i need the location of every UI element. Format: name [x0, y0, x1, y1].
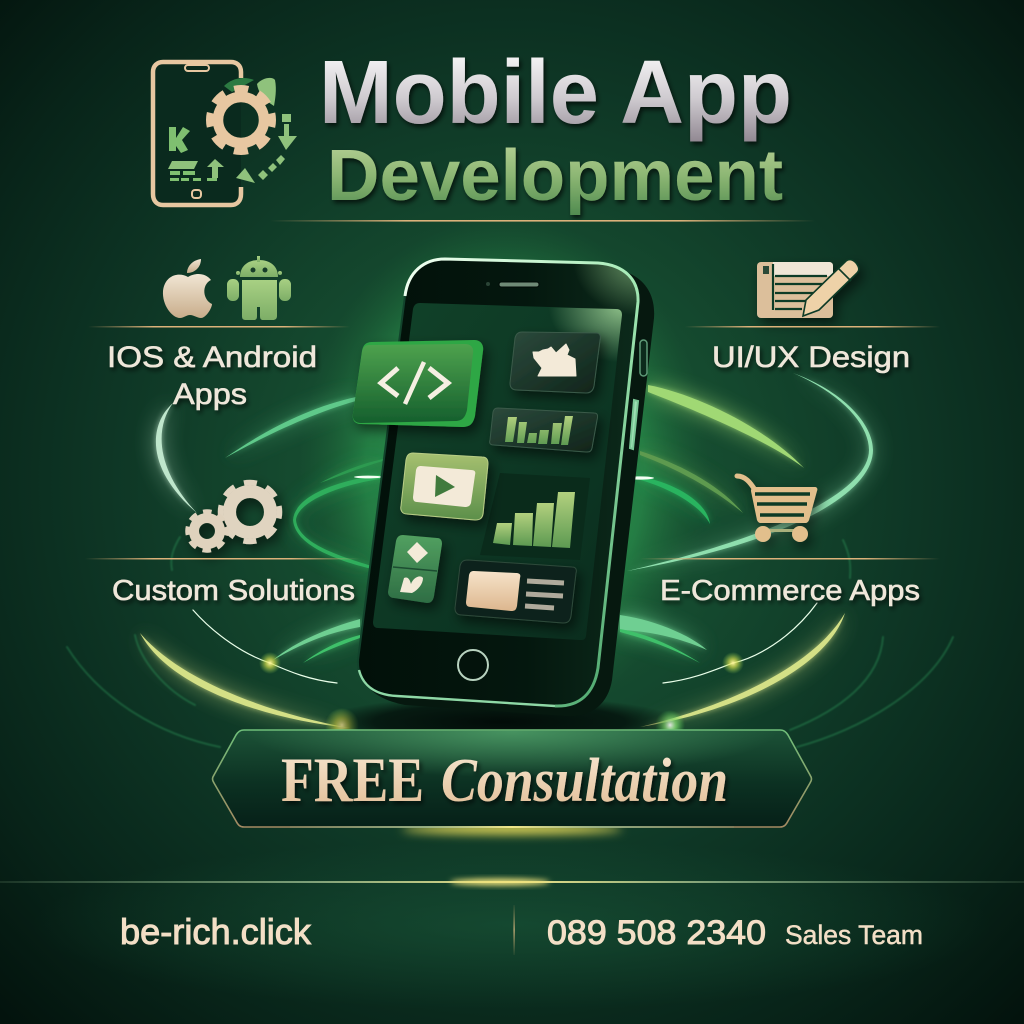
orbit light rings	[67, 373, 953, 747]
banner: free consultation	[212, 730, 812, 827]
phone face sheen	[520, 261, 638, 360]
banner bottom glow	[402, 824, 622, 834]
label: IOS & Android	[107, 341, 317, 374]
social card	[510, 332, 600, 393]
screen panel	[373, 303, 622, 640]
bright phone edge: top and right	[405, 259, 638, 706]
title	[319, 43, 792, 216]
side buttons	[630, 340, 647, 449]
feature: custom solutions	[85, 482, 360, 607]
footer: website: be-rich.click	[120, 911, 312, 952]
footer: sales team: Sales Team	[785, 920, 923, 950]
footer divider	[0, 878, 1024, 886]
shadow beneath phone	[320, 696, 680, 748]
screen shine	[500, 306, 622, 400]
tile with two icons	[388, 535, 442, 603]
video card	[401, 453, 488, 520]
banner text	[281, 744, 728, 815]
smartphone	[353, 259, 654, 716]
header logo icon: phone with gear	[153, 62, 297, 205]
footer vertical divider	[514, 905, 515, 955]
small bar chart card	[490, 408, 598, 452]
icon: document and pencil	[757, 260, 859, 318]
home button	[458, 650, 488, 680]
label: Apps	[173, 378, 247, 411]
title line 1: Mobile App	[319, 43, 792, 143]
banner text: Consultation	[441, 747, 728, 815]
icon: gears	[188, 482, 280, 550]
icon: shopping cart	[737, 476, 817, 542]
large bar chart	[493, 492, 575, 548]
footer: phone number: 089 508 2340	[547, 914, 766, 952]
banner bottom highlight	[290, 826, 734, 828]
title underline	[270, 220, 815, 222]
label: E-Commerce Apps	[660, 575, 920, 607]
label: UI/UX Design	[712, 341, 910, 374]
banner text: FREE	[281, 744, 424, 815]
label: Custom Solutions	[112, 575, 355, 607]
feature: e-commerce apps	[640, 476, 940, 607]
phone body depth	[362, 262, 654, 716]
icon: apple	[163, 259, 212, 318]
title line 2: Development	[327, 136, 783, 216]
speaker and camera	[486, 282, 539, 287]
bright phone edge: bottom	[359, 670, 555, 706]
footer background glow	[32, 840, 992, 1010]
sparkles	[259, 652, 744, 742]
icon: android	[227, 256, 291, 320]
feature: iOS and Android apps	[88, 256, 350, 411]
media card	[455, 560, 576, 623]
phone face	[358, 259, 638, 706]
feature: UI/UX design	[685, 260, 940, 374]
central glow behind phone	[300, 215, 710, 725]
code card	[353, 340, 483, 427]
chart panel	[480, 473, 590, 560]
banner top sheen	[244, 731, 780, 777]
